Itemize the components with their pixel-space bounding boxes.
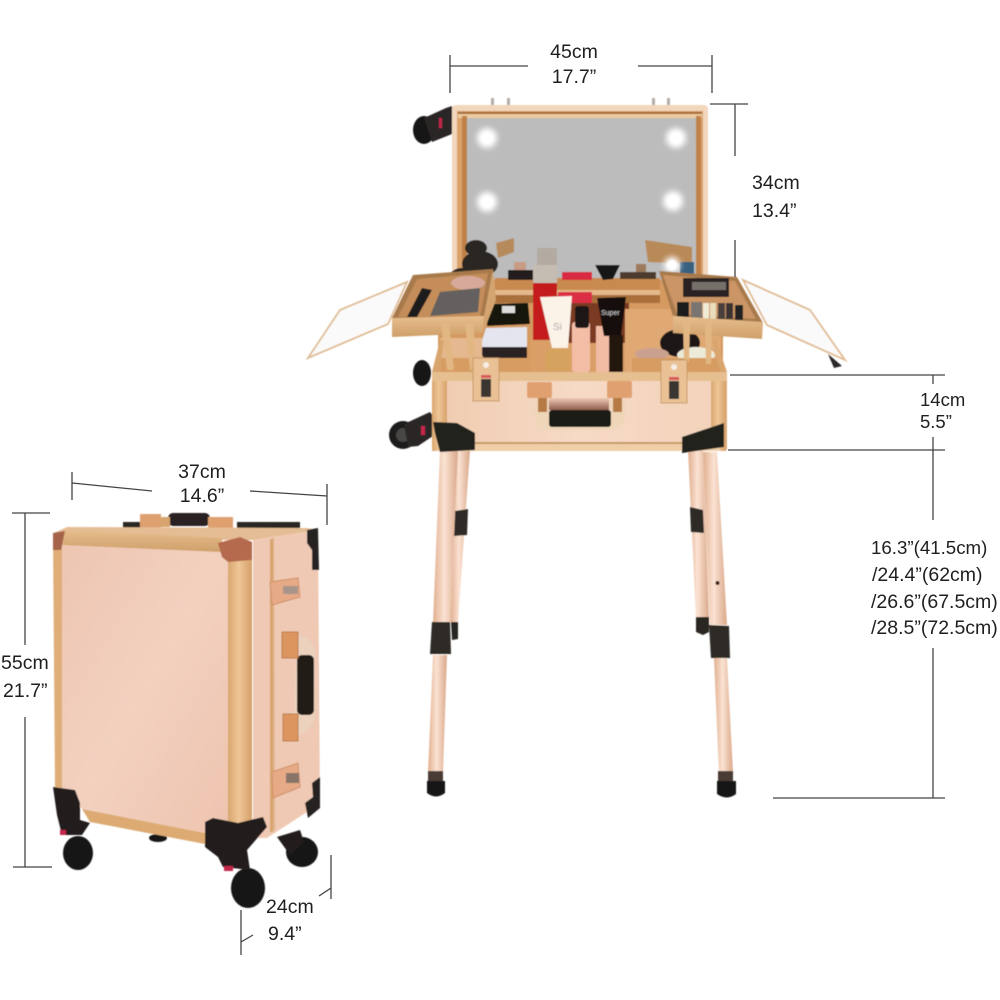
rear legs — [450, 450, 709, 640]
suitcase height label: 55cm 21.7in — [1, 652, 49, 702]
illustration: closed rolling suitcase — [53, 513, 320, 908]
suitcase height label: 55cm 21.7in: 55cm — [1, 652, 49, 674]
makeup brushes — [450, 240, 498, 284]
top and side rails — [53, 530, 252, 844]
case height label: 14cm 5.5in: 14cm — [920, 389, 965, 410]
right compartment — [625, 309, 721, 372]
case height label: 14cm 5.5in: 5.5” — [920, 411, 952, 432]
width label: 45cm 17.7in — [550, 41, 598, 88]
right tray with mirror flap — [659, 271, 845, 368]
case interior with cosmetics: Super — [601, 310, 620, 317]
mirror surface — [467, 118, 696, 280]
width label: 45cm 17.7in: 17.7” — [552, 66, 596, 88]
pink bottle — [572, 322, 590, 372]
depth label: 34cm 13.4in: 13.4” — [752, 200, 796, 222]
case interior with cosmetics — [432, 238, 727, 372]
top handle — [123, 513, 300, 529]
top face — [54, 527, 318, 540]
depth label: 34cm 13.4in: 34cm — [752, 172, 800, 194]
suitcase width label: 37cm 14.6in: 14.6” — [180, 485, 224, 507]
compact boxes — [487, 303, 530, 326]
side face — [253, 528, 320, 838]
suitcase height label: 55cm 21.7in: 21.7” — [3, 680, 47, 702]
suitcase depth label: 24cm 9.4in: 24cm — [266, 896, 314, 918]
leg height labels: /28.5”(72.5cm) — [871, 617, 998, 639]
black corner guards — [433, 422, 475, 452]
wheels — [63, 830, 318, 908]
leg height labels: 16.3”(41.5cm) — [871, 537, 987, 558]
combination locks — [473, 358, 687, 403]
illustration: open makeup case on legs — [308, 98, 845, 798]
lid wheel — [413, 106, 452, 144]
left compartment — [440, 338, 482, 370]
leg height labels: /26.6”(67.5cm) — [871, 591, 998, 613]
carry handle — [527, 381, 632, 430]
centre compartment — [530, 340, 630, 372]
front panel — [60, 545, 228, 836]
leg height labels: /24.4”(62cm) — [872, 564, 983, 586]
mirror lights — [477, 128, 686, 212]
black tube and pink tube — [596, 326, 609, 372]
case interior with cosmetics: Si — [553, 322, 562, 333]
suitcase width label: 37cm 14.6in — [178, 461, 226, 507]
side locks — [270, 578, 300, 798]
suitcase width label: 37cm 14.6in: 37cm — [178, 461, 226, 483]
depth label: 34cm 13.4in — [752, 172, 800, 222]
left tray with mirror flap — [308, 269, 496, 370]
white tube — [540, 296, 572, 348]
suitcase depth label: 24cm 9.4in: 9.4” — [268, 923, 302, 945]
front right leg — [703, 452, 736, 798]
side carry handle — [282, 632, 315, 741]
case height label: 14cm 5.5in — [920, 389, 965, 432]
case wheels — [389, 360, 436, 449]
red bottle with silver cap — [537, 248, 557, 265]
side guard bottom — [305, 777, 320, 818]
suitcase depth label: 24cm 9.4in — [266, 896, 314, 945]
front left leg — [427, 450, 458, 796]
black corner guards — [53, 787, 267, 871]
case front body — [432, 358, 727, 453]
mirror lid — [452, 98, 708, 290]
width label: 45cm 17.7in: 45cm — [550, 41, 598, 63]
leg height labels — [871, 537, 998, 639]
side guard top — [307, 528, 319, 570]
